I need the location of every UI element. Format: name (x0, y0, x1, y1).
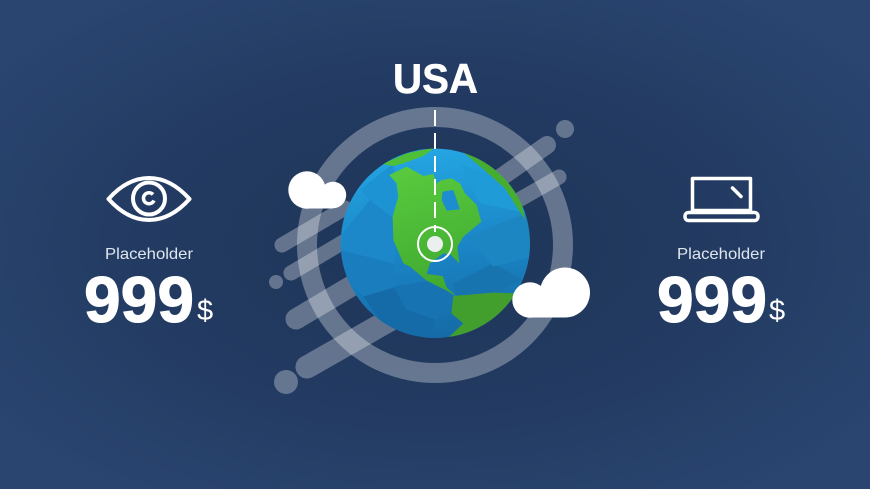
hudson bay (442, 190, 460, 211)
value: 999 (657, 263, 767, 336)
icon: eye (108, 178, 190, 220)
cloud left (288, 171, 346, 209)
right stat (657, 178, 785, 336)
currency: $ (197, 295, 213, 327)
ring (307, 117, 563, 373)
dashed line (434, 110, 436, 232)
title: USA (393, 55, 478, 102)
icon: laptop (685, 178, 758, 220)
label: Placeholder (105, 246, 194, 263)
label: Placeholder (677, 246, 766, 263)
cloud right (512, 268, 590, 318)
currency: $ (769, 295, 785, 327)
value: 999 (84, 263, 194, 336)
arctic rim (384, 148, 434, 166)
location marker (418, 227, 452, 261)
left stat (84, 178, 213, 336)
south america (447, 293, 517, 339)
globe (340, 147, 532, 343)
north america (389, 167, 481, 297)
low-poly ocean facets (340, 163, 532, 343)
diagonal streaks (269, 120, 574, 394)
